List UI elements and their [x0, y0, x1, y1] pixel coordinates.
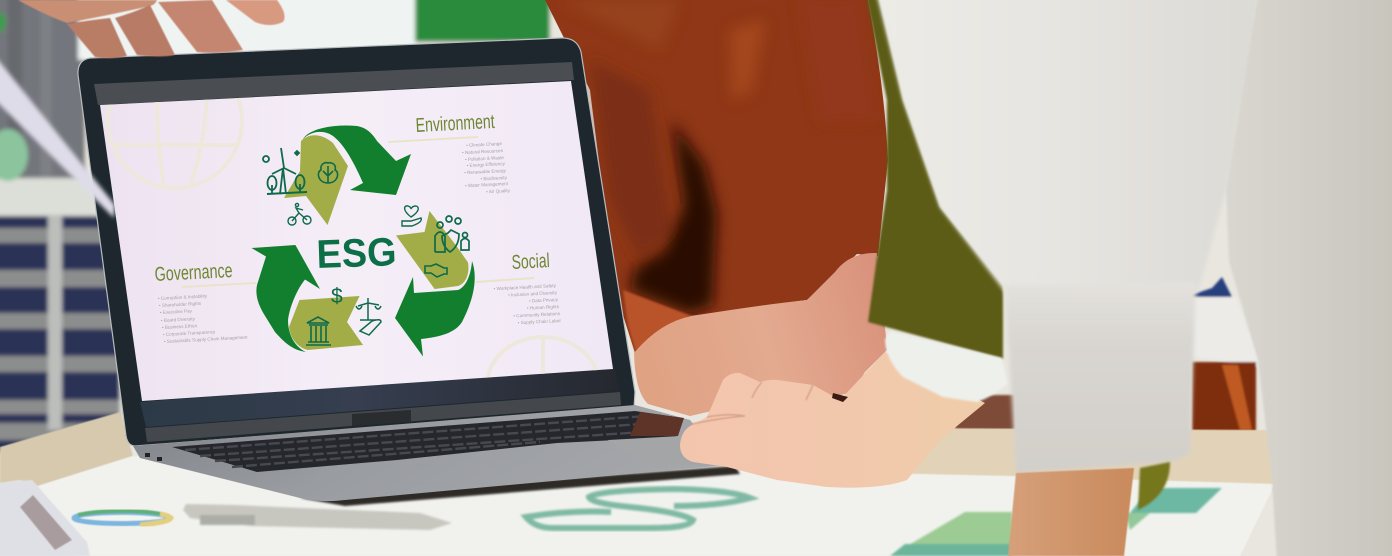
lower screen band [140, 366, 619, 427]
pen [183, 504, 452, 530]
ESG slide on laptop screen [100, 81, 613, 401]
person in rust shirt [545, 0, 888, 353]
olive panel: social [396, 211, 468, 289]
olive vest [866, 0, 1003, 359]
chart: donut chart on the paper [74, 511, 171, 525]
text block: Environment list: • Water Management [465, 181, 509, 188]
icon: heart on hand [402, 206, 421, 226]
olive panel: governance [289, 296, 363, 350]
icon: wind turbine and trees [263, 148, 307, 194]
text block: Environment list: • Air Quality [486, 188, 511, 194]
text block: Social list: • Community Relations [513, 311, 561, 318]
keyboard [172, 411, 683, 472]
green recycling arrow: governance [252, 245, 320, 352]
desk clock device at lower left [0, 480, 90, 556]
heading: Environment: Environment [415, 111, 495, 137]
table top [0, 412, 1276, 490]
heading: Governance: Governance [154, 260, 233, 286]
text block: Social list: • Human Rights [527, 304, 560, 311]
laptop base and deck [133, 405, 727, 501]
text block: Environment list: • Pollution & Waste [465, 155, 504, 162]
text block: Governance list [158, 293, 248, 344]
ports [145, 453, 162, 461]
watch edge detail [832, 393, 848, 402]
olive lining at wrist [1138, 462, 1170, 510]
green tables on the paper [890, 488, 1222, 556]
reflective stick at left of laptop [0, 56, 115, 218]
text block: Governance list: • Corporate Transparency [163, 329, 216, 337]
near hand and forearm [680, 352, 985, 488]
icon: family with shield [435, 216, 469, 252]
icon: cyclist [288, 203, 311, 225]
ESG center label: ESG [316, 230, 397, 277]
text block: Social list: • Inclusion and Diversity [508, 290, 558, 298]
olive panel: environment [284, 135, 348, 225]
text block: Governance list: • Sustainable Supply Chain Management [164, 335, 248, 344]
text block: Environment list: • Biodiversity [480, 175, 508, 181]
paper report on the desk [38, 456, 1275, 556]
white blouse sleeve [877, 0, 1258, 292]
text block: Governance list: • Executive Pay [160, 308, 193, 315]
text block: Governance list: • Business Ethics [162, 323, 198, 330]
text block: Environment list: • Natural Resources [462, 148, 504, 155]
chart: teal gear shapes on the paper [526, 489, 750, 528]
text block: Environment list: • Climate Change [466, 141, 502, 148]
text block: Governance list: • Board Diversity [161, 316, 196, 323]
finger shadow lines [692, 382, 813, 424]
text block: Governance list: • Shareholder Rights [159, 301, 202, 308]
green recycling arrow: environment [303, 126, 411, 195]
green recycling arrow: social [395, 261, 475, 356]
icon: bank building [306, 317, 331, 345]
icon: dollar coin: $ [331, 285, 343, 308]
upper hand at top left [18, 0, 285, 58]
white sleeve cuff on near arm [885, 331, 1008, 402]
text block: Environment list [462, 141, 511, 194]
laptop lid and bezel [78, 38, 635, 446]
top screen band [94, 62, 574, 105]
standing person forearm [1008, 468, 1134, 556]
text block: Social list: • Workplace Health and Safety [494, 283, 557, 291]
background rust furniture and navy panel at right [955, 277, 1258, 435]
watermark globes [106, 98, 598, 378]
icon: handshake [425, 264, 447, 277]
standing person trousers at right [1226, 0, 1392, 556]
heading: Environment [388, 111, 495, 143]
text block: Governance list: • Corruption & Instability [158, 293, 208, 301]
blouse cuff [1005, 282, 1196, 473]
shadow under laptop [300, 466, 740, 506]
text block: Social list: • Data Privacy [529, 297, 559, 304]
trackpad [608, 436, 722, 468]
text block: Social list: • Supply Chain Labor [518, 318, 562, 325]
text block: Environment list: • Energy Efficiency [467, 161, 506, 168]
far hand and forearm [634, 253, 887, 416]
icon: balance scale and hand [356, 298, 381, 335]
icon: tree on olive panel [318, 163, 338, 183]
shirt folds [560, 0, 875, 314]
heading: Social [476, 250, 550, 283]
heading: Social: Social [511, 250, 550, 274]
text block: Environment list: • Renewable Energy [464, 168, 507, 175]
laptop [78, 38, 740, 506]
text block: Social list [494, 283, 562, 325]
